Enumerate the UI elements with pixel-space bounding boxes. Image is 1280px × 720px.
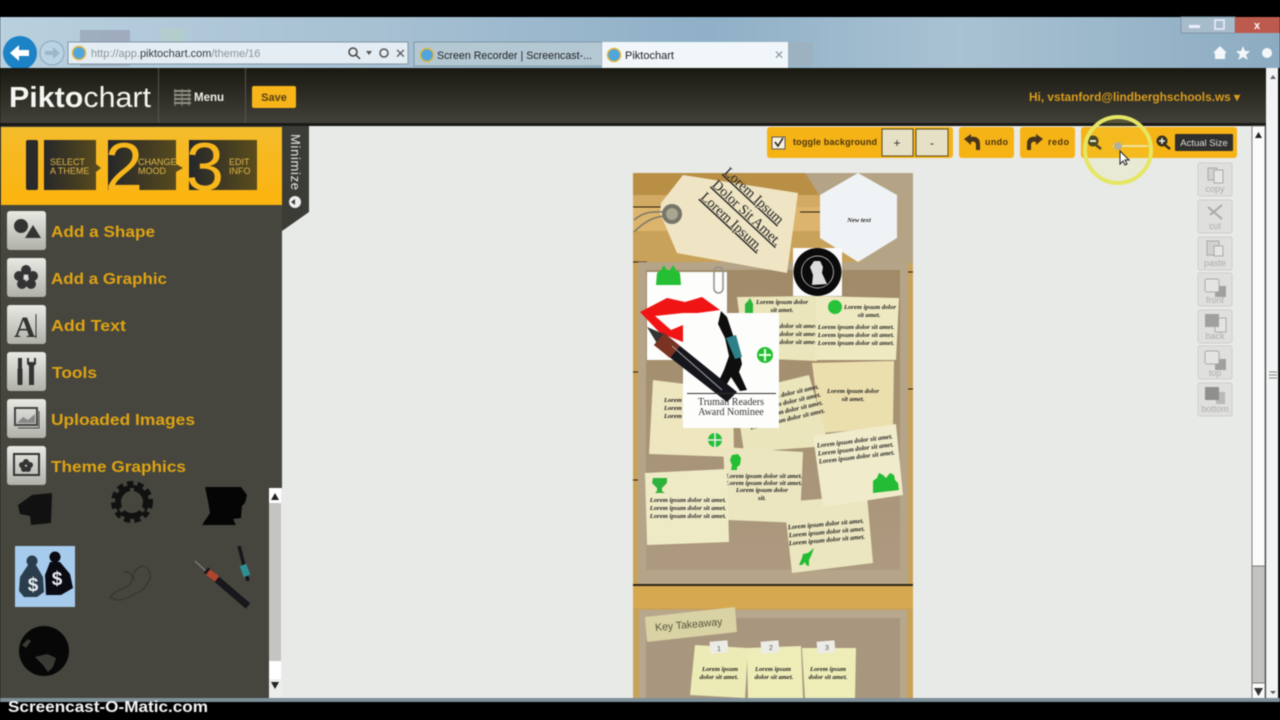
front: front [1206,295,1225,305]
menu item: Add a Graphic [7,258,167,297]
caption [698,397,764,418]
menu item: Add Text [7,305,127,344]
redo button [1020,127,1075,158]
cut: cut [1209,221,1221,231]
step labels: CHANGE [138,157,177,167]
menu item: Tools [7,352,97,391]
large pen [647,327,737,402]
watermark: Screencast-O-Matic.com [8,699,208,716]
window controls: x [1254,20,1261,32]
takeaway note 2: 2 [769,645,773,652]
note: person: sit. [757,495,766,502]
icon: green clover [757,347,773,363]
step numbers [105,129,224,205]
note: plain: sit amet. [841,396,865,403]
thumbnail: puzzle head [18,493,52,525]
browser scrollbar [1266,68,1280,700]
key takeaway tag [645,607,737,642]
browser chrome [0,17,1280,70]
note: pointing figure: Lorem ipsum dolor sit amet. [788,534,866,547]
step labels: INFO [229,166,250,176]
cut [1198,200,1232,233]
note: group: Lorem ipsum dolor sit amet. [815,433,893,450]
canvas background [282,126,1252,700]
note: tilted middle [735,375,829,452]
note: trophy [645,469,729,545]
wood background [633,173,913,700]
tab: Piktochart: ✕ [774,48,784,62]
wood band [633,586,913,608]
minimize tab: Minimize [288,134,303,190]
note: walker: Lorem ipsum dolor sit amet. [741,339,819,346]
tab: Piktochart [602,42,813,68]
bottom [1198,383,1232,416]
skeleton key figure [715,311,747,391]
zoom control: Actual Size [1180,138,1228,149]
back [1198,310,1232,343]
note: pointing figure: Lorem ipsum dolor sit amet. [787,518,865,531]
takeaway note 1: Lorem ipsum [701,666,738,673]
forward button [40,41,64,65]
top [1198,346,1232,379]
note: trophy: Lorem ipsum dolor sit amet. [649,505,727,512]
toggle background group [767,127,953,158]
infographic poster [633,165,913,700]
white picture card [647,311,779,428]
takeaway note 2 [747,640,803,698]
toggle background group: + [893,136,901,150]
luggage tag title: Lorem Ipsum [721,165,786,228]
left sidebar [0,126,309,700]
luggage tag title: Dolor Sit Amet. [709,178,784,249]
address bar: http://app.piktochart.com/theme/16 [91,48,260,60]
thumbnail: money bags: $ [28,575,39,596]
takeaway note 2: Lorem ipsum [754,666,791,673]
caption: Award Nominee [698,407,764,418]
takeaway note 3: Lorem ipsum [809,666,846,673]
note: apple: Lorem ipsum dolor sit amet. [817,324,895,331]
luggage tag title [634,165,798,273]
note: left text: Lorem ipsum dolor [663,413,716,420]
note: group: Lorem ipsum dolor sit amet. [816,441,894,458]
back button [3,36,37,70]
zoom control [1081,127,1237,158]
step labels [50,157,250,176]
menu item: Uploaded Images: Uploaded Images [51,412,195,429]
note: trophy: Lorem ipsum dolor sit amet. [649,513,727,520]
thumbnail: leaf sketch [110,566,150,600]
icon: paperclip [714,267,723,293]
note: left text: Lorem ipsum dolor [663,397,716,404]
step labels: A THEME [50,166,89,176]
badge [793,248,842,296]
toggle background group: - [930,136,934,150]
note: left text: Lorem ipsum dolor [663,405,716,412]
note: apple [815,296,899,360]
lips [640,297,720,342]
cork board 2 [639,610,907,700]
icon: green clover lower [708,433,722,447]
menu item: Theme Graphics: Theme Graphics [51,459,186,476]
note: trophy: Lorem ipsum dolor sit amet. [649,497,727,504]
note: person: Lorem ipsum dolor sit amet. [725,473,803,480]
luggage tag title: Lorem Ipsum. [697,190,766,255]
sidebar scrollbar [269,488,282,700]
step numbers: 2 [105,129,143,205]
menu item: Theme Graphics [7,446,186,485]
step labels: EDIT [229,157,250,167]
note: white paper [647,272,727,360]
note: person: Lorem ipsum dolor [735,487,788,494]
tab: Piktochart: Piktochart [625,50,674,62]
front [1198,273,1232,306]
note: tilted middle: Lorem ipsum dolor sit amet. [747,399,824,424]
hexagon text: New text [846,217,871,224]
canvas scrollbar [1252,126,1265,700]
note: pointing figure [784,495,873,573]
takeaway note 1 [690,640,748,698]
top: top [1209,368,1221,378]
bottom window edge [0,698,1280,702]
steps panel [1,127,282,205]
note: apple: Lorem ipsum dolor sit amet. [817,332,895,339]
menu item: Add Text: A [14,311,36,344]
cork board 1 [633,262,913,586]
top toolbar [767,117,1237,183]
thumbnail: head silhouette [202,487,247,525]
redo button: redo [1048,137,1070,147]
note: walker: sit amet. [770,307,794,314]
key takeaway tag: Key Takeaway [655,616,724,634]
toggle background group: toggle background [793,137,877,147]
note: walker: Lorem ipsum dolor sit amet. [741,323,819,330]
copy: copy [1205,184,1225,194]
thumbnail: gear [114,484,150,520]
takeaway note 3 [802,640,856,698]
note: person: Lorem ipsum dolor sit amet. [725,480,803,487]
note: plain [812,361,894,433]
menu item: Tools: Tools [52,365,97,382]
menu item: Add a Shape: Add a Shape [51,224,155,241]
paste [1198,237,1232,270]
hexagon text [820,173,897,262]
window controls [1181,17,1280,33]
graphic thumbnails [15,484,248,676]
save button [252,86,296,108]
address bar: ✕ [395,46,406,61]
takeaway note 3: dolor sit amet. [809,674,848,681]
minimize tab [282,126,309,231]
mouse cursor [1120,151,1129,165]
app header bar [0,68,1280,126]
copy [1198,163,1232,196]
note: apple: Lorem ipsum dolor sit amet. [817,340,895,347]
note: pointing figure: Lorem ipsum dolor sit amet. [788,526,866,539]
note: walker: Lorem ipsum dolor [755,299,808,306]
bottom: bottom [1201,404,1229,414]
note: tilted middle: Lorem ipsum dolor sit amet. [743,383,820,408]
note: tilted middle: Lorem ipsum dolor sit amet. [749,407,826,432]
address bar [68,42,408,64]
menu [174,89,224,106]
thumbnail: pens [195,546,248,607]
note: walker: Lorem ipsum dolor sit amet. [741,331,819,338]
menu item: Add Text: Add Text [51,318,127,335]
logo: Piktochart [9,82,151,114]
thumbnail: globe [19,626,69,676]
menu item: Add a Shape [7,211,155,250]
paste: paste [1204,258,1226,268]
user greeting: Hi, vstanford@lindberghschools.ws ▾ [1029,92,1241,104]
note: tilted middle: Lorem ipsum dolor sit amet. [745,391,822,416]
note: group: Lorem ipsum dolor sit amet. [817,449,895,466]
takeaway note 1: 1 [717,646,721,653]
undo button: undo [985,137,1008,147]
note: person [723,447,803,523]
takeaway note 2: dolor sit amet. [755,674,794,681]
menu: Menu [194,92,224,104]
takeaway note 1: dolor sit amet. [700,674,739,681]
menu item: Uploaded Images [7,399,195,438]
cursor highlight [1085,117,1151,183]
tab: Screen Recorder: Screen Recorder | Screencast-... [437,50,592,62]
back: back [1205,331,1225,341]
browser toolbar icons [1213,46,1272,60]
thumbnail: money bags [15,546,75,607]
icon: green binoculars [656,265,681,285]
note: plain: Lorem ipsum dolor [826,388,879,395]
note: apple: Lorem ipsum dolor [843,304,896,311]
step labels: MOOD [138,166,166,176]
undo button [959,127,1014,158]
takeaway note 3: 3 [825,645,829,652]
thumbnail: money bags: $ [52,569,63,590]
step numbers: 3 [186,129,224,205]
step labels: SELECT [50,157,86,167]
menu item: Add a Graphic: Add a Graphic [51,271,167,288]
note: walker [737,296,819,361]
note: left text [649,380,734,457]
object tool buttons [1198,163,1232,416]
save button: Save [261,92,287,104]
caption: Truman Readers [698,397,764,408]
note: apple: sit amet. [857,312,881,319]
note: group [813,424,903,507]
tab: Screen Recorder [414,42,602,66]
